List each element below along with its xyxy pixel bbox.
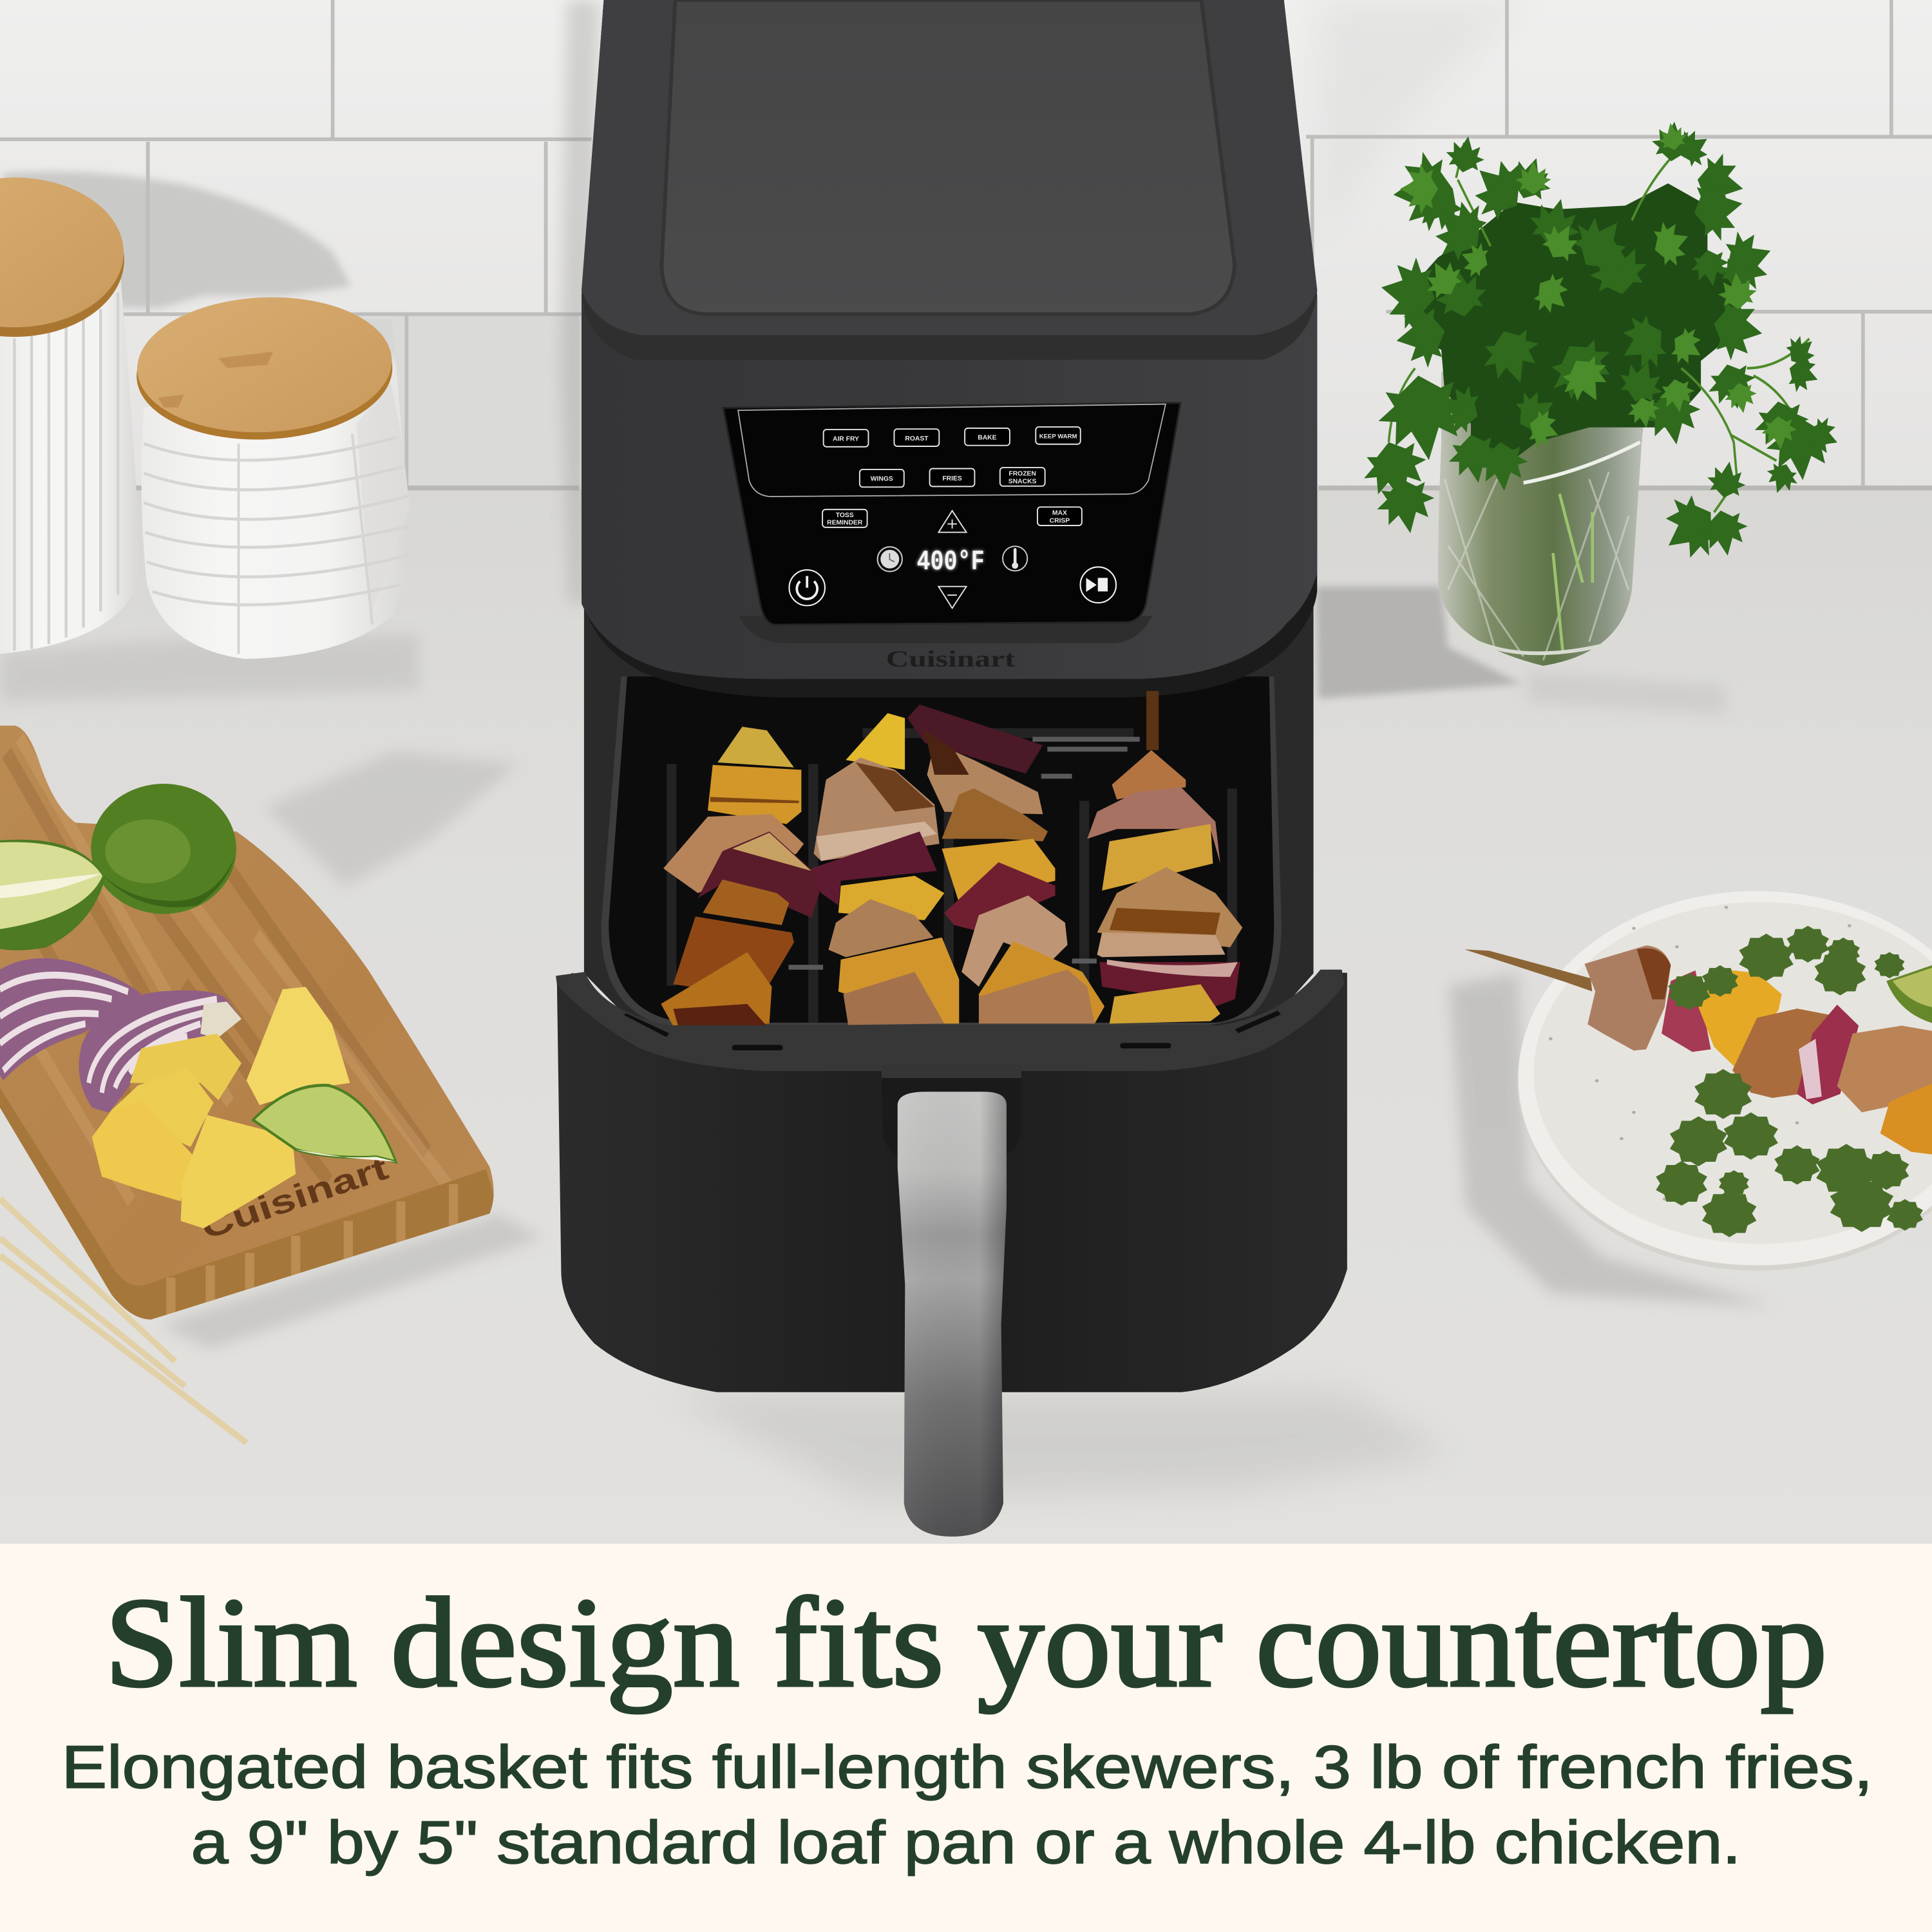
board brand text: Cuisinart <box>196 1149 393 1246</box>
top lid panel <box>661 0 1235 314</box>
wooden skewer tip <box>1464 949 1592 992</box>
skewer 4 <box>1087 691 1242 1024</box>
button: max crisp: MAX <box>1052 509 1067 516</box>
bamboo lid <box>135 292 394 444</box>
button: fries <box>930 469 974 486</box>
plate with skewer <box>1464 891 1932 1271</box>
short ribbed canister <box>135 292 410 659</box>
fryer shadow on wall <box>561 0 600 604</box>
button: fries: FRIES <box>942 475 962 482</box>
whole lime <box>91 784 236 914</box>
button: keep warm <box>1036 427 1081 444</box>
bamboo lid <box>0 178 124 337</box>
air fryer <box>556 0 1347 1537</box>
button: air fry <box>824 430 868 447</box>
silver grip <box>898 1092 1007 1537</box>
top frame <box>582 0 1317 348</box>
cilantro garnish <box>1656 925 1923 1237</box>
skewer food <box>1584 945 1932 1155</box>
fryer upper housing <box>582 0 1317 697</box>
button: bake <box>965 428 1010 446</box>
halved lime <box>0 840 105 951</box>
bamboo skewers on counter <box>0 1199 247 1443</box>
button: frozen snacks: SNACKS <box>1009 478 1037 485</box>
button: roast <box>894 429 939 446</box>
thermometer icon <box>1003 546 1027 571</box>
skewer 1 <box>661 726 824 1026</box>
drawer front <box>556 970 1347 1392</box>
skewer 3 <box>907 705 1104 1024</box>
power button <box>789 570 825 605</box>
brand name: Cuisinart <box>886 646 1016 672</box>
cutting board <box>0 726 500 1329</box>
handle <box>882 1066 1021 1537</box>
button: toss reminder <box>822 509 867 527</box>
clock icon <box>878 547 902 571</box>
button: max crisp <box>1037 507 1082 526</box>
tall ribbed canister <box>0 178 141 654</box>
headline: Slim design fits your countertop <box>105 1572 1827 1714</box>
button: wings <box>860 469 904 487</box>
button: max crisp: CRISP <box>1050 518 1070 525</box>
button: air fry: AIR FRY <box>833 436 859 443</box>
lime on plate <box>1886 965 1932 1023</box>
button: frozen snacks <box>1000 468 1045 486</box>
button: roast: ROAST <box>905 435 929 442</box>
play and stop button <box>1081 567 1116 603</box>
button: bake: BAKE <box>978 435 997 442</box>
button: toss reminder: TOSS <box>836 512 854 519</box>
button: keep warm: KEEP WARM <box>1039 433 1077 440</box>
button: toss reminder: REMINDER <box>827 520 863 527</box>
rim vents <box>623 1010 1281 1050</box>
limes, onions and pineapple on board <box>0 784 396 1228</box>
skewer 2 <box>811 713 959 1025</box>
button: frozen snacks: FROZEN <box>1009 471 1036 478</box>
basket outer walls <box>584 591 1314 1037</box>
pineapple chunks <box>92 987 350 1228</box>
description line 2: a 9" by 5" standard loaf pan or a whole 4-lb chicken. <box>191 1808 1741 1876</box>
basket cavity <box>601 676 1282 1030</box>
temperature display: 400°F <box>916 546 985 578</box>
minus arrow <box>938 587 967 608</box>
temperature display: 400°F <box>916 546 985 578</box>
parsley in glass jar <box>1358 120 1843 666</box>
handle bracket <box>882 1066 1021 1156</box>
caption panel <box>0 1544 1932 1932</box>
kebabs in basket <box>661 691 1242 1026</box>
panel recess <box>739 616 1152 643</box>
red onion slices <box>0 958 242 1112</box>
tiled wall <box>0 0 1932 493</box>
button: wings: WINGS <box>871 476 893 483</box>
glass jar <box>1438 361 1649 666</box>
control panel <box>723 403 1180 625</box>
drawer rim <box>556 970 1345 1071</box>
parsley foliage <box>1358 120 1843 574</box>
description line 1: Elongated basket fits full-length skewers, 3 lb of french fries, <box>62 1733 1873 1801</box>
plate <box>1517 891 1932 1271</box>
shadows on counter <box>0 587 1774 1497</box>
plus arrow <box>938 511 967 533</box>
countertop <box>0 489 1932 1549</box>
lime wedge <box>253 1085 396 1162</box>
